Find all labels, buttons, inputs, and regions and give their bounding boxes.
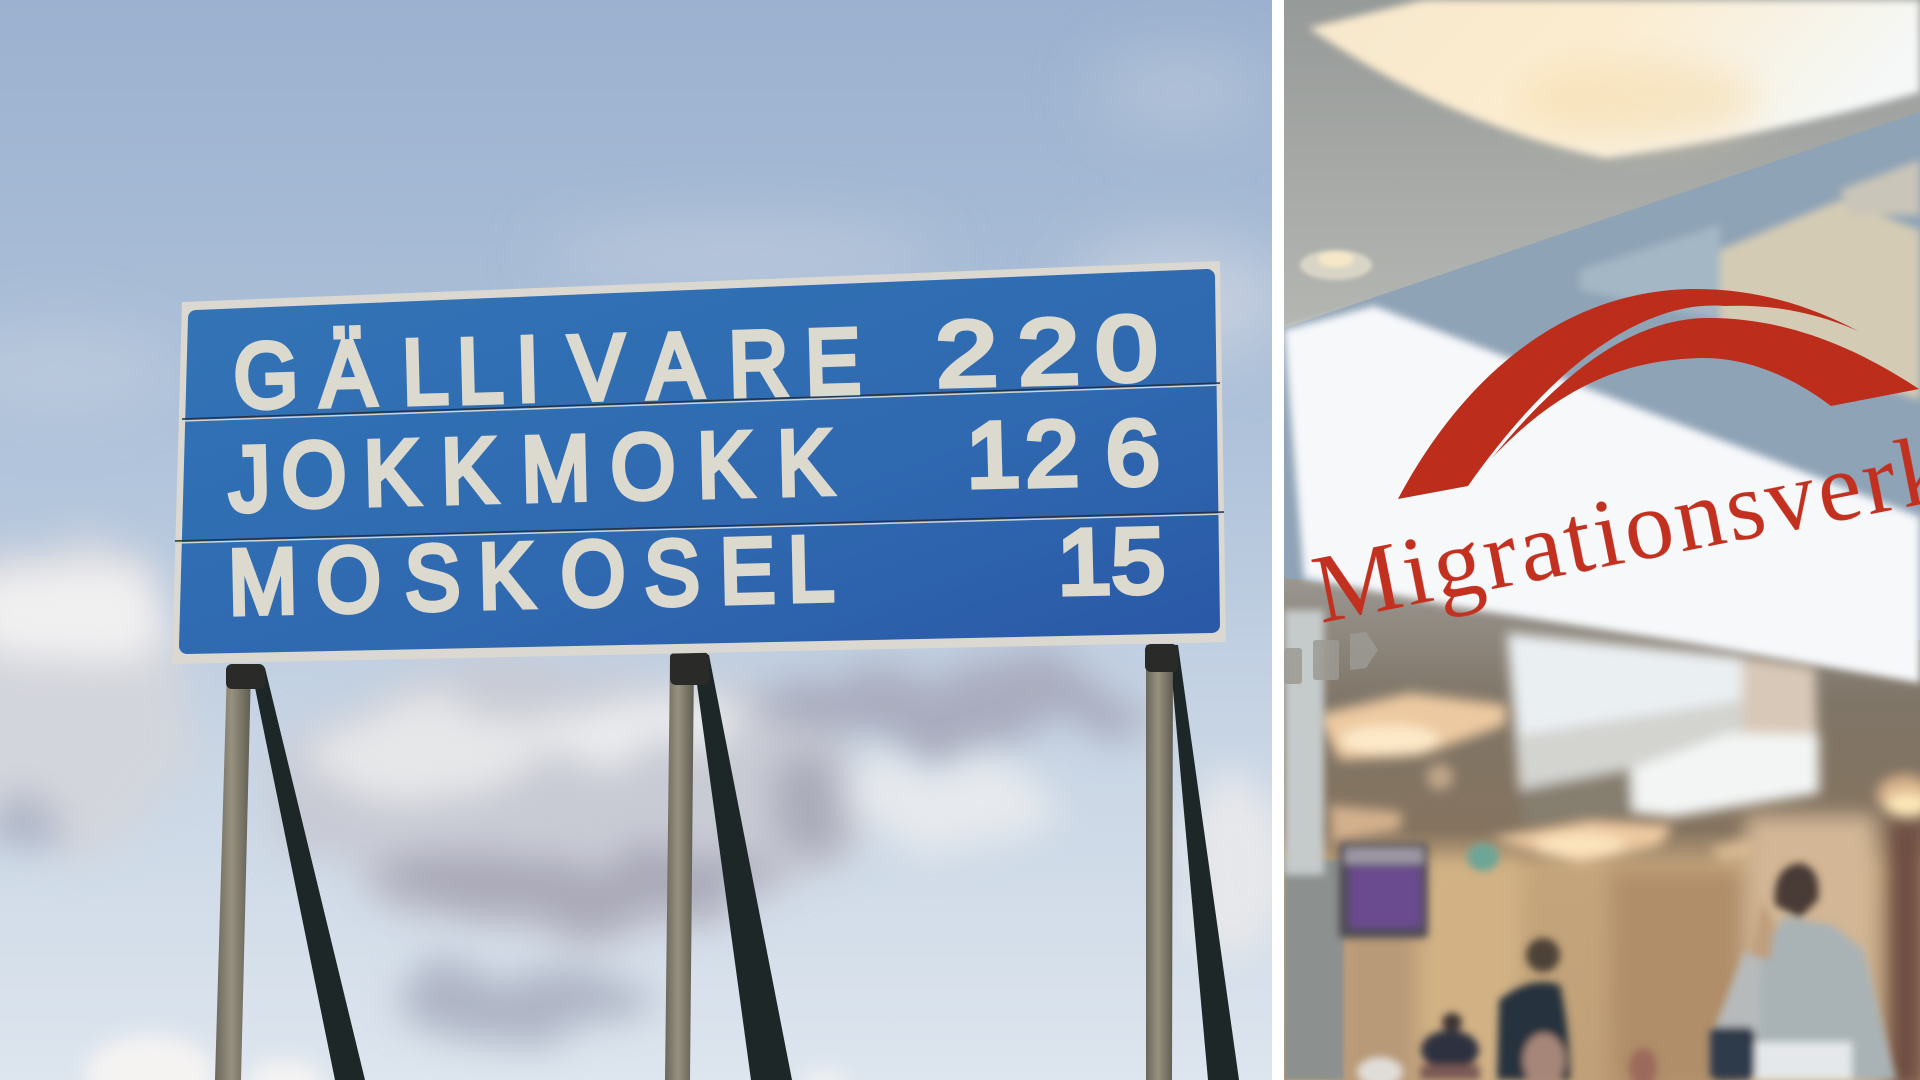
bright reflection on glass [1284,306,1920,683]
Migrationsverket logo [1304,289,1920,645]
wall sections [1345,815,1920,1080]
post brackets [226,644,1178,689]
post right [1146,645,1173,1080]
door handle marks [1284,632,1378,684]
clouds [0,50,1290,1080]
row: Jokkmokk 126: 126 [965,401,1161,507]
row: Gällivare 220: GÄLLIVARE [232,309,862,428]
row: Moskosel 15: MOSKOSEL [227,517,835,634]
brace right [1169,645,1239,1080]
person: seated with cap [1420,1013,1480,1080]
background behind glass [1284,112,1920,640]
row: Moskosel 15 [232,526,1164,617]
sign text rows [228,313,1164,617]
sign posts [215,644,1239,1080]
sign face [187,277,1212,646]
lower ceiling lights [1316,693,1920,864]
ceiling lamp warm glow [1520,60,1760,140]
person: face at bottom [1523,1033,1565,1080]
lamp 4 [1710,838,1755,862]
lamp 3 [1491,820,1673,864]
logo arc: lower swoosh [1492,318,1919,458]
row: Jokkmokk 126 [228,417,1158,514]
row: Gällivare 220 [235,313,1156,411]
row: Gällivare 220: 220 [934,296,1159,406]
road sign [172,261,1226,664]
reflected signage panel [1507,633,1819,825]
wall screen [1339,843,1428,938]
ceiling spot light [1300,250,1372,280]
panel: road sign photo [0,0,1290,1080]
row: Jokkmokk 126: JOKKMOKK [228,410,834,531]
lower interior room [1284,306,1920,1080]
row: Moskosel 15: 15 [1056,509,1166,614]
panel: Migrationsverket glass door photo [1284,0,1920,1080]
pillar [1284,610,1344,1080]
lamp 1 [1316,693,1507,760]
right lamp [1877,775,1920,815]
ceiling [1284,0,1920,328]
exit sign [1467,843,1499,871]
brace left [251,668,365,1080]
spot [1427,764,1453,790]
sky background [0,0,1272,1080]
brace middle [693,655,792,1080]
blurred people [1357,863,1896,1080]
post left [215,668,251,1080]
sign border [172,261,1226,664]
lamp 2 [1329,805,1402,842]
person: man in dark jacket [1497,938,1570,1080]
post middle [665,655,694,1080]
background people [1357,1048,1657,1080]
ceiling lamp [1309,0,1920,158]
person: woman in striped top [1710,863,1896,1080]
logo arc: upper swoosh [1398,289,1858,499]
windows behind glass [1580,160,1920,400]
sign panel joints [175,383,1224,543]
